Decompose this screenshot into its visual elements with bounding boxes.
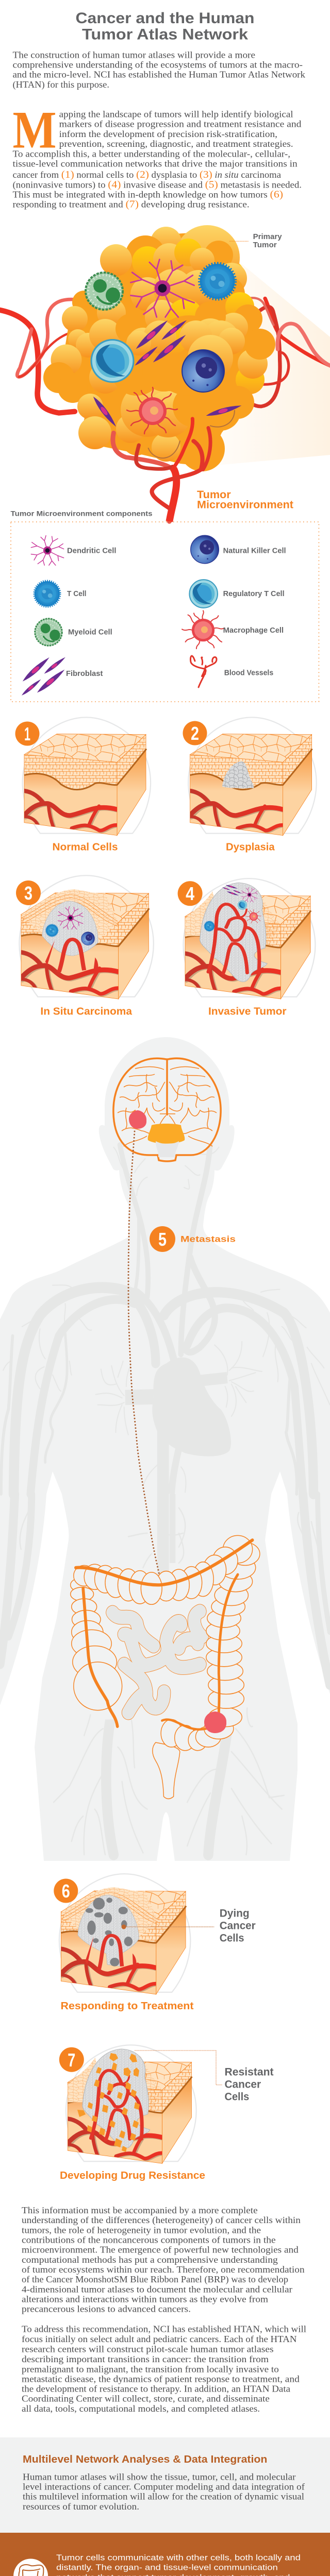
treated tumor <box>78 1895 139 1970</box>
myeloid cell <box>35 619 112 646</box>
text: tumor cells communicate: distantly. The organ- and tissue-level communication <box>56 2564 278 2572</box>
description: resources of tumor evolution. <box>23 2501 139 2512</box>
panel: multilevel network analyses <box>0 2437 330 2533</box>
caption: Normal Cells <box>53 842 118 853</box>
human body silhouette <box>0 1037 330 1861</box>
badge 5 and metastasis label: Metastasis <box>180 1234 236 1244</box>
text block: heterogeneity: precancerous lesions to advanced cancers. <box>22 2304 191 2314</box>
body paragraph: mapping the landscape: To accomplish this, a better understanding of the molecular-, cellular-, <box>12 148 290 159</box>
icon: colon <box>13 2558 48 2576</box>
lower body vessels <box>0 1494 330 1855</box>
body paragraph: mapping the landscape: cancer from (1) normal cells to (2) dysplasia to (3) in situ carcinoma <box>12 169 281 180</box>
colon tumor <box>204 1711 226 1733</box>
text block: heterogeneity: contributions of the noncancerous components of tumors in the <box>22 2234 276 2245</box>
macrophage cell <box>182 611 284 649</box>
natural killer cell: Natural Killer Cell <box>223 547 286 555</box>
callout: primary tumor: Primary <box>253 233 282 241</box>
caption: Invasive Tumor <box>208 1006 287 1017</box>
branching vessels <box>3 1147 330 1492</box>
intro text block: (HTAN) for this purpose. <box>12 79 109 90</box>
major vessels <box>1 1140 330 1494</box>
body paragraph: mapping the landscape <box>12 109 302 210</box>
body paragraph: mapping the landscape: prevention, screening, diagnostic, and treatment strategies. <box>59 139 293 149</box>
body paragraph: mapping the landscape: markers of disease progression and treatment resistance and <box>59 119 302 129</box>
blood vessels in front of tumor <box>113 324 330 521</box>
callout: resistant cancer cells: Cells <box>225 2091 249 2103</box>
callout: primary tumor <box>229 233 282 249</box>
title: Cancer and the Human <box>75 10 255 27</box>
text block: heterogeneity: of tumor ecosystems within our reach. Therefore, one recommendation <box>22 2264 305 2275</box>
small intestine <box>97 1593 212 1719</box>
blood vessels <box>190 656 273 687</box>
number badge 4: 4 <box>186 883 194 904</box>
callout: dying cancer cells: Dying <box>220 1908 250 1920</box>
carcinoma mass <box>42 901 99 972</box>
intestines <box>71 1535 260 1799</box>
heading: tumor microenvironment: Tumor <box>197 489 231 501</box>
macrophage cell: Macrophage Cell <box>223 626 284 635</box>
description <box>23 2471 305 2512</box>
brain folds <box>118 1059 217 1146</box>
dendritic cell <box>31 536 116 565</box>
panel: legend <box>11 522 319 702</box>
heading: Multilevel Network Analyses & Data Integration <box>23 2454 267 2465</box>
text block: HTAN: the development of resistance to therapy. In addition, an HTAN Data <box>22 2384 290 2394</box>
text: tumor cells communicate <box>56 2553 301 2576</box>
intro text block: The construction of human tumor atlases will provide a more <box>12 49 255 60</box>
body paragraph: mapping the landscape: apping the landscape of tumors will help identify biological <box>59 109 293 119</box>
panel: in situ carcinoma <box>16 875 154 1017</box>
caption: Developing Drug Resistance <box>60 2170 205 2181</box>
text block: HTAN: all data, tools, computational models, and completed atlases. <box>22 2403 260 2414</box>
description: level interactions of cancer. Computer modeling and data integration of <box>23 2482 305 2492</box>
fibroblast <box>21 655 103 697</box>
text block: HTAN <box>22 2324 306 2414</box>
text: tumor cells communicate: Tumor cells communicate with other cells, both locally and <box>56 2553 301 2562</box>
metastasis path <box>128 1131 205 1709</box>
intro text block <box>12 49 305 90</box>
t cell: T Cell <box>67 590 87 598</box>
caption: Responding to Treatment <box>61 2001 194 2012</box>
badge 5 and metastasis label <box>150 1226 236 1252</box>
intro text block: comprehensive understanding of the ecosystems of tumors at the macro- <box>12 60 303 70</box>
text block: heterogeneity: of the Cancer MoonshotSM Blue Ribbon Panel (BRP) was to develop <box>22 2274 288 2284</box>
resistant and dying cells <box>77 2053 140 2152</box>
panel: invasive tumor <box>178 878 315 1017</box>
text block: heterogeneity: tumors, the role of heterogeneity in tumor evolution, and the <box>22 2225 261 2235</box>
regulatory t cell: Regulatory T Cell <box>223 590 285 598</box>
drop cap: M <box>12 101 57 160</box>
dendritic cell: Dendritic Cell <box>67 547 117 555</box>
text block: HTAN: To address this recommendation, NCI has established HTAN, which will <box>22 2324 306 2334</box>
cerebellum <box>148 1124 185 1144</box>
caption: In Situ Carcinoma <box>40 1006 133 1017</box>
number badge 2 <box>183 721 207 745</box>
text block: HTAN: metastatic disease, the dynamics of patient response to treatment, and <box>22 2374 300 2384</box>
circulatory system <box>0 1140 330 1855</box>
number badge 3: 3 <box>24 883 32 904</box>
body paragraph: mapping the landscape: tissue-level communication networks that drive the major transitions in <box>12 158 298 168</box>
panel: responding to treatment <box>54 1874 194 2012</box>
text block: HTAN: describing important transitions in cancer: the transition from <box>22 2354 269 2364</box>
blood vessels: Blood Vessels <box>224 669 273 677</box>
heading: tumor microenvironment <box>197 489 293 511</box>
number badge 6 <box>54 1878 78 1903</box>
callout: dying cancer cells <box>122 1908 256 1944</box>
text block: HTAN: premalignant to malignant, the transition from locally invasive to <box>22 2364 279 2374</box>
number badge 7 <box>59 2047 84 2072</box>
description: Human tumor atlases will show the tissue, tumor, cell, and molecular <box>23 2471 296 2482</box>
text block: heterogeneity: understanding of the differences (heterogeneity) of cancer cells within <box>22 2215 301 2225</box>
tumor cells <box>86 260 242 434</box>
text block: heterogeneity <box>22 2205 305 2314</box>
callout: resistant cancer cells <box>135 2050 274 2103</box>
brain metastasis <box>129 1110 146 1129</box>
legend heading: Tumor Microenvironment components <box>10 510 153 518</box>
number badge 7: 7 <box>68 2049 75 2071</box>
text block: heterogeneity: alterations and interactions within tumors as they evolve from <box>22 2294 268 2304</box>
text block: heterogeneity: This information must be accompanied by a more complete <box>22 2205 258 2215</box>
number badge 4 <box>178 881 203 906</box>
text block: heterogeneity: microenvironment. The emergence of powerful new technologies and <box>22 2245 299 2255</box>
panel: normal cells <box>15 717 151 853</box>
callout: primary tumor: Tumor <box>253 241 277 249</box>
colon <box>71 1535 260 1799</box>
body paragraph: mapping the landscape: responding to treatment and (7) developing drug resistance. <box>12 199 250 210</box>
body paragraph: mapping the landscape: inform the development of precision risk-stratification, <box>59 129 277 139</box>
panel: dysplasia <box>183 717 317 853</box>
body paragraph: mapping the landscape: This must be integrated with in-depth knowledge on how tumors (6) <box>12 189 283 200</box>
natural killer cell <box>191 535 286 564</box>
number badge 1 <box>15 721 39 746</box>
callout: dying cancer cells: Cells <box>220 1932 244 1944</box>
fibroblast: Fibroblast <box>66 670 103 678</box>
caption: Dysplasia <box>226 842 275 853</box>
body paragraph: mapping the landscape: (noninvasive tumors) to (4) invasive disease and (5) metastasis is needed. <box>12 179 302 190</box>
callout: resistant cancer cells: Resistant <box>225 2066 274 2078</box>
text block: heterogeneity: computational methods has put a comprehensive understanding <box>22 2255 278 2265</box>
text block: HTAN: Coordinating Center will collect, store, curate, and disseminate <box>22 2394 270 2404</box>
dying cells <box>86 1897 133 1967</box>
number badge 1: 1 <box>24 723 30 744</box>
regulatory t cell <box>189 580 285 608</box>
callout: resistant cancer cells: Cancer <box>225 2079 261 2091</box>
title: Tumor Atlas Network <box>82 26 249 43</box>
panel: developing drug resistance <box>59 2045 205 2181</box>
badge 5 and metastasis label: 5 <box>158 1229 167 1250</box>
t cell <box>35 581 87 606</box>
intro text block: and the micro-level. NCI has established the Human Tumor Atlas Network <box>12 70 305 80</box>
zoom cone behind tumor <box>217 247 330 465</box>
title <box>75 10 255 43</box>
colon bands <box>76 1540 253 1730</box>
brain stem <box>156 1141 179 1157</box>
text block: HTAN: focus initially on select adult and pediatric cancers. Each of the HTAN <box>22 2334 297 2344</box>
number badge 6: 6 <box>62 1880 70 1902</box>
number badge 2: 2 <box>191 723 199 744</box>
tumor mass <box>43 225 275 471</box>
callout: dying cancer cells: Cancer <box>220 1920 256 1932</box>
panel: network levels <box>0 2533 330 2576</box>
brain <box>113 1058 221 1161</box>
description: this multilevel information will allow for the creation of dynamic visual <box>23 2492 304 2502</box>
myeloid cell: Myeloid Cell <box>68 628 112 636</box>
text block: heterogeneity: 4-dimensional tumor atlases to document the molecular and cellular <box>22 2284 292 2294</box>
text block: HTAN: research centers will construct pilot-scale human tumor atlases <box>22 2344 274 2354</box>
tumor illustration <box>0 225 330 521</box>
blood vessels behind tumor <box>0 298 330 413</box>
dysplasia lump <box>222 761 254 788</box>
number badge 3 <box>16 880 41 905</box>
heading: tumor microenvironment: Microenvironment <box>197 499 293 511</box>
